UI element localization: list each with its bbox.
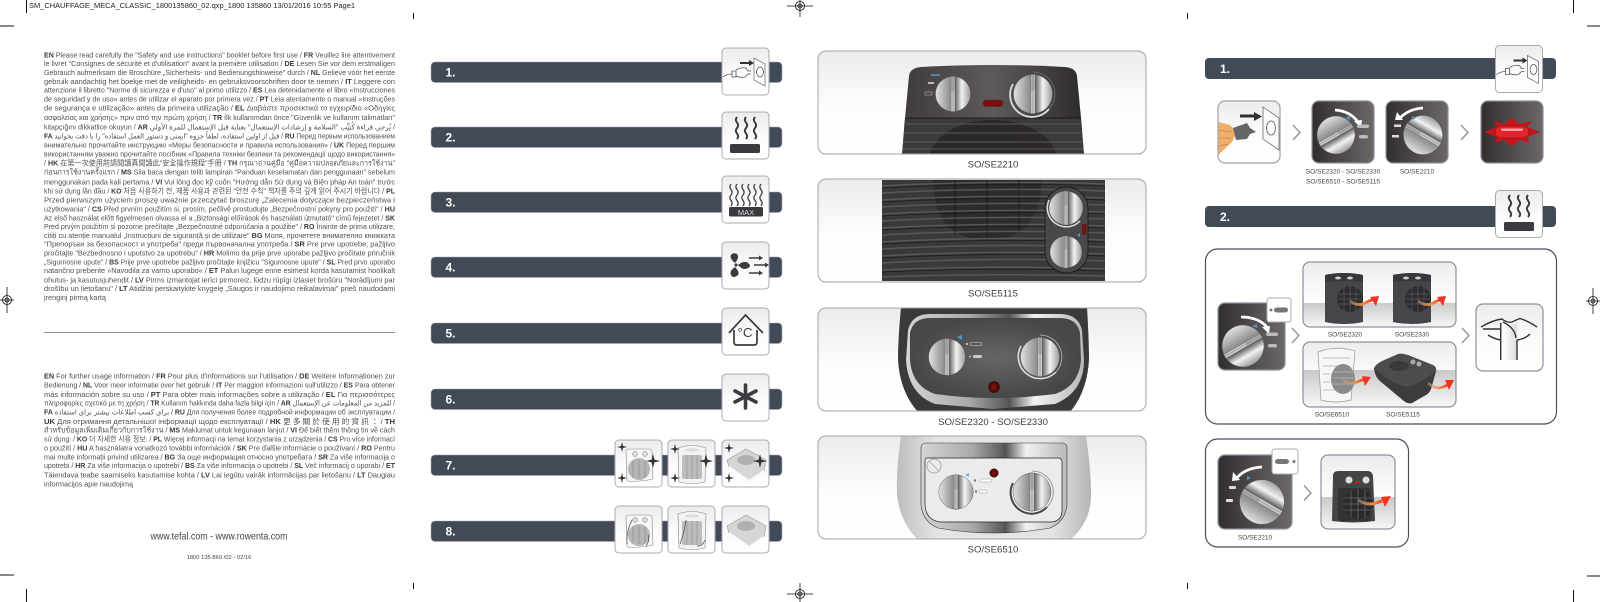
- model label SO/SE6510: SO/SE6510: [968, 544, 1018, 556]
- text block: safety booklet notice in all languages: pročitajte "Bezbednosno i uputstvo za upotrebu" / HR Molimo da prije prve uporabe pažljivo pročitate priručnik: [44, 249, 395, 258]
- text block: safety booklet notice in all languages: Gebrauch aufmerksam die Broschüre „Sicherheits- und Bedienungshinweise" durch / NL Gelieve vóór het eerste: [44, 68, 395, 77]
- text block: further usage information in all languages: sử dụng: / KO 더 자세한 사용 정보: / PL Więcej informacji na temat korzystania z urządzenia / CS Pro více informací: [44, 435, 396, 444]
- text block: further usage information in all languages: UK Для отримання детальнішої інформації щодо експлуатації / HK 更 多 關 於 使 用 的 資 訊 ： / TH: [44, 417, 395, 426]
- text block: safety booklet notice in all languages: "Препоръки за безопасност и употреба" преди първоначална употреба / SR Pre prve upotrebe, pažljivo: [44, 240, 395, 249]
- text block: safety booklet notice in all languages: kitapçığını dikkatlice okuyun / AR يُرجى قراءة كُتيِّب "السلامة و إرشادات الإستعمال" بعناية قبل الإستعمال للمرة الأولى /: [44, 121, 396, 131]
- step bar 5 with house temperature icon: 5.: [446, 326, 456, 340]
- text block: safety booklet notice in all languages: ohutus- ja kasutusjuhendit / LV Pirms izmantojat ierīci pirmoreiz, lūdzu rūpīgi izlasiet brošūru "Norādījumi par: [44, 275, 396, 284]
- text block: safety booklet notice in all languages: attenzione il libretto "Norme di sicurezza e d'uso" al primo utilizzo / ES Lea detenidamente el libro «Instrucciones: [44, 86, 395, 95]
- text block: safety booklet notice in all languages: FA قبل از اولین استفاده، لطفاً جزوه "ایمنی و دستور العمل استفاده" را با دقت بخوانید / RU Перед первым использованием: [44, 130, 395, 141]
- caption SO/SE2320: SO/SE2320: [1328, 332, 1363, 338]
- text block: safety booklet notice in all languages: įrenginį pirmą kartą: [44, 293, 107, 302]
- step bar 1 with plug icon: [431, 48, 782, 95]
- document reference code: 1800 135 860 /02 - 02/16: [187, 555, 251, 561]
- caption SO/SE2210: SO/SE2210: [1238, 534, 1273, 542]
- caption SO/SE6510: SO/SE6510: [1315, 412, 1350, 418]
- step bar 2 with low heat icon: 2.: [446, 130, 456, 144]
- text block: safety booklet notice in all languages: внимательно прочитайте инструкцию «Меры безопасности и правила использования» / UK Перед першим: [44, 141, 395, 150]
- tile: dial turned clockwise: [1310, 101, 1374, 163]
- text block: safety booklet notice in all languages: de seguridad y de uso» antes de utilizar el aparato por primera vez / PT Leia atentamente o manual «Instruções: [44, 95, 395, 104]
- model label SO/SE2320 - SO/SE2330: SO/SE2320 - SO/SE2330: [938, 417, 1048, 428]
- panel: low heat for SO/SE2210: [1206, 439, 1408, 547]
- text block: safety booklet notice in all languages: „Sigurnosne upute" / BS Prije prve upotrebe pažljivo pročitajte knjižicu "Sigurnosne upute" / SL Pred prvo uporabo: [44, 257, 395, 266]
- panel: SO/SE2210 controls: [818, 50, 1146, 154]
- text block: safety booklet notice in all languages: Az első használat előtt figyelmesen olvassa el a „Biztonsági előírások és használati útmutató" című fejezetet / SK: [44, 214, 396, 223]
- arrow: [1461, 125, 1468, 140]
- arrow: [1462, 328, 1469, 343]
- text block: safety booklet notice in all languages: Przed pierwszym użyciem proszę uważnie przeczytać broszurę „Zalecenia dotyczące bezpieczeństwa i: [44, 196, 395, 205]
- text block: safety booklet notice in all languages: menggunakan pada kali pertama / VI Vui lòng đọc kỹ cuốn "Hướng dẫn Sử dụng và Biện pháp An toàn" trước: [44, 178, 395, 187]
- step bar 3 with max heat icon: MAX: [738, 208, 754, 217]
- print slug header: SM_CHAUFFAGE_MECA_CLASSIC_1800135860_02.qxp_1800 135860 13/01/2016 10:55 Page1: [29, 1, 355, 10]
- model label SO/SE2210: SO/SE2210: [968, 160, 1018, 170]
- tile: garment and heat comfort icon: [1476, 304, 1543, 371]
- photo panel: SO/SE2320 and SO/SE2330 heaters: [1303, 262, 1456, 327]
- step bar 5 with house temperature icon: °C: [738, 325, 752, 340]
- caption SO/SE2330: SO/SE2330: [1395, 332, 1430, 338]
- step bar 8 with storage icons: [431, 506, 782, 553]
- text block: safety booklet notice in all languages: gebruik aandachtig het boekje met de veiligheids- en gebruiksvoorschriften door te nemen / IT Leggere con: [44, 77, 395, 86]
- text block: further usage information in all languages: FA برای کسب اطلاعات بیشتر برای استفاده / RU Для получения более подробной информации об эксплуатации /: [44, 407, 396, 416]
- text block: safety booklet notice in all languages: EN Please read carefully the "Safety and use instructions" booklet before first use / FR Veuillez lire attentivement: [44, 50, 395, 59]
- text block: further usage information in all languages: Bedienung / NL Voor meer informatie over het gebruik / IT Per maggiori informazioni sull'utilizzo / ES Para obtener: [44, 381, 395, 390]
- text block: safety booklet notice in all languages: використанням уважно прочитайте посібник «Правила техніки безпеки та рекомендації щодо використання»: [44, 150, 395, 159]
- text block: safety booklet notice in all languages: de segurança e utilização» antes da primeira utilização / EL Διαβάστε προσεκτικά το εγχειρίδιο «Οδηγίες: [44, 104, 395, 113]
- text block: further usage information in all languages: สำหรับข้อมูลเพิ่มเติมเกี่ยวกับการใช้งาน / MS Maklumat untuk kegunaan lanjut / VI Để biết thêm thông tin về cách: [44, 425, 395, 435]
- panel: SO/SE2320 and SO/SE2330 controls: [818, 307, 1146, 412]
- caption: models for first dial: SO/SE2320 - SO/SE2330: [1306, 168, 1381, 176]
- text block: safety booklet notice in all languages: natančno preberite »Navodila za varno uporabo« / ET Palun lugege enne esimest korda kasutamist hoolikalt: [44, 266, 395, 275]
- text block: further usage information in all languages: Täiendava teabe saamiseks kasutamise kohta / LV Lai iegūtu vairāk informācijas par lietošanu / LT Daugiau: [44, 470, 395, 479]
- panel: SO/SE5115 controls: [818, 179, 1146, 282]
- step bar 3 with max heat icon: [431, 176, 782, 223]
- text block: safety booklet notice in all languages: le livret "Consignes de sécurité et d'utilisation" avant la première utilisation / DE Lesen Sie vor dem erstmaligen: [44, 59, 395, 68]
- panel: low heat for four models: [1206, 249, 1556, 424]
- step bar 3 with max heat icon: 3.: [446, 196, 456, 210]
- text block: further usage information in all languages: EN For further usage information / FR Pour plus d'informations sur l'utilisation / DE Weitere Informationen zur: [44, 371, 396, 380]
- text block: further usage information in all languages: mai multe informații privind utilizarea / BG За още информация относно употребата / SR Za više informacija o: [44, 453, 395, 462]
- text block: further usage information in all languages: upotrebi / HR Za više informacija o upotrebi / BS Za više informacija o upotrebi / SL Več informacij o uporabi / ET: [44, 461, 395, 470]
- step bar 1 with plug icon: 1.: [446, 66, 456, 80]
- text block: safety booklet notice in all languages: / HK 在第一次使用前請閱讀真閱讀此"安全操作規程"手冊 / TH กรุณาอ่านคู่มือ "คู่มือความปลอดภัยและการใช้งาน": [44, 159, 395, 168]
- step bar 8 with storage icons: 8.: [446, 524, 456, 538]
- arrow: [1304, 486, 1311, 500]
- text block: further usage information in all languages: πληροφορίες σχετικά με τη χρήση / TR Kullanım hakkında daha fazla bilgi için / AR للمزيد من المعلومات عن الإستعمال /: [44, 399, 396, 408]
- step bar 4 with fan icon: [431, 242, 782, 289]
- model label SO/SE5115: SO/SE5115: [968, 288, 1018, 300]
- section bar 2 with low heat icon: 2.: [1220, 210, 1230, 224]
- text block: further usage information in all languages: más información sobre su uso / PT Para obter mais informações sobre a utilização / EL Για περισσότερες: [44, 390, 395, 399]
- caption: model for second dial: SO/SE2210: [1400, 168, 1435, 176]
- tile: dial with legend callout: [1218, 449, 1298, 533]
- caption SO/SE5115: SO/SE5115: [1386, 412, 1420, 418]
- text block: further usage information in all languages: informacijos apie naudojimą: [44, 480, 134, 489]
- text block: safety booklet notice in all languages: ασφαλείας και χρήσης» πριν από την πρώτη χρήση / TR İlk kullanımdan önce "Güvenlik ve kullanım talimatları": [44, 113, 395, 122]
- photo tile: SO/SE2210 heater: [1321, 455, 1395, 529]
- text block: safety booklet notice in all languages: Pred prvým použitím si pozorne prečítajte „Bezpečnostné odporúčania a použitie" / RO Înainte de prima utilizare,: [44, 222, 395, 231]
- caption: models for first dial: SO/SE6510 - SO/SE5115: [1306, 178, 1380, 186]
- step bar 2 with low heat icon: [431, 112, 782, 159]
- tile: dial with legend callout: [1214, 298, 1291, 375]
- text block: safety booklet notice in all languages: użytkowania" / CS Před prvním použitím si, prosím, pečlivě prostudujte „Bezpečnostní pokyny pro použití" / HU: [44, 205, 395, 214]
- tile: dial turned anticlockwise: [1386, 101, 1450, 163]
- section bar 1 with plug icon: [1205, 46, 1556, 92]
- photo panel: SO/SE6510 and SO/SE5115 heaters: [1303, 342, 1456, 407]
- text block: further usage information in all languages: [44, 371, 396, 489]
- step bar 6 with frost icon: [431, 374, 782, 421]
- step bar 6 with frost icon: 6.: [446, 392, 456, 406]
- section bar 1 with plug icon: 1.: [1220, 62, 1230, 76]
- caption: models for first dial: [1306, 168, 1381, 186]
- tile: indicator light glowing: [1481, 101, 1543, 163]
- step bar 7 with cleaning icons: [431, 440, 782, 487]
- text block: safety booklet notice in all languages: khi sử dụng lần đầu / KO 처음 사용하기 전, 제품 사용과 관련된 "안전 수칙" 책자를 주의 깊게 읽어 주시기 바랍니다 / PL: [44, 187, 395, 196]
- step bar 7 with cleaning icons: 7.: [446, 458, 456, 472]
- arrow: [1293, 125, 1300, 140]
- arrow: [1292, 328, 1299, 343]
- text block: safety booklet notice in all languages: [44, 50, 396, 302]
- panel: SO/SE6510 controls: [818, 436, 1146, 540]
- tile: hand plugging into socket: [1218, 101, 1280, 163]
- text block: safety booklet notice in all languages: drošību un lietošanu" / LT Atidžiai perskaitykite knygelę „Saugos ir naudojimo reikalavimai" prieš naudodami: [44, 284, 395, 293]
- step bar 4 with fan icon: 4.: [446, 260, 456, 274]
- step bar 5 with house temperature icon: [431, 308, 782, 355]
- section bar 2 with low heat icon: [1205, 190, 1556, 238]
- text block: safety booklet notice in all languages: ก่อนการใช้งานครั้งแรก / MS Sila baca dengan teliti lampiran "Panduan keselamatan dan penggunaan" sebelum: [44, 167, 395, 177]
- website addresses: www.tefal.com - www.rowenta.com: [150, 532, 288, 542]
- text block: safety booklet notice in all languages: citiți cu atenție manualul „Instrucțiuni de siguranță și de utilizare" BG Моля, прочетете внимателно книжката: [44, 231, 396, 240]
- text block: further usage information in all languages: o použití / HU A használatra vonatkozó további információk / SK Pre ďalšie informácie o používaní / RO Pentru: [44, 444, 395, 453]
